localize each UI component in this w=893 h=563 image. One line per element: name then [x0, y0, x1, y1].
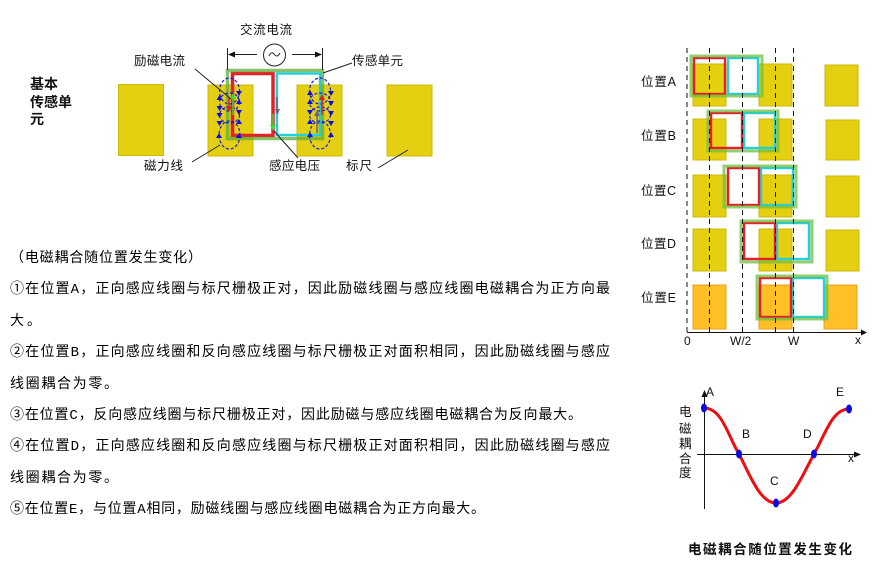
- position A: [641, 56, 858, 106]
- y axis label: 磁: [679, 421, 692, 436]
- AC source dimension: [228, 44, 322, 70]
- panel: position diagrams: [641, 48, 867, 348]
- chart: coupling versus position: [679, 385, 861, 509]
- position D: [641, 221, 859, 271]
- text block: explanation: [10, 250, 610, 518]
- y axis label: 电: [679, 405, 692, 419]
- position C: 位置C: [641, 183, 676, 198]
- label: AC current: 交流电流: [240, 22, 292, 37]
- dashed position guides: [687, 48, 794, 332]
- position axis: x: [855, 333, 861, 347]
- text block: explanation: ⑤在位置E，与位置A相同，励磁线圈与感应线圈电磁耦合为正方向最大。: [10, 500, 485, 518]
- position C: [641, 166, 859, 217]
- position axis: 0: [684, 334, 691, 348]
- position axis: W/2: [730, 334, 752, 348]
- point labels: E: [836, 385, 844, 399]
- text block: explanation: ③在位置C，反向感应线圈与标尺栅极正对，因此励磁与感应线圈电磁耦合为反向最大。: [10, 406, 582, 424]
- label: induced voltage: 感应电压: [269, 158, 320, 173]
- position axis: [684, 330, 867, 348]
- label: scale: 标尺: [346, 159, 372, 173]
- label: excitation current: 励磁电流: [134, 53, 185, 68]
- text block: explanation: （电磁耦合随位置发生变化）: [10, 250, 202, 267]
- text block: explanation: 线圈耦合为零。: [10, 470, 118, 487]
- text block: explanation: ②在位置B，正向感应线圈和反向感应线圈与标尺栅极正对面积相同，因此励磁线圈与感应: [10, 343, 610, 361]
- heading: basic sensing unit: 传感单: [30, 94, 72, 110]
- position A: 位置A: [641, 74, 677, 89]
- heading: basic sensing unit: [30, 76, 72, 127]
- label: flux lines: 磁力线: [144, 158, 183, 173]
- position axis: W: [788, 334, 800, 348]
- point labels: [706, 385, 854, 488]
- y axis label: 耦: [679, 437, 692, 451]
- point labels: x: [848, 451, 854, 465]
- position D: 位置D: [641, 236, 676, 251]
- position E: 位置E: [641, 290, 676, 305]
- position B: [641, 111, 859, 160]
- curve points: [701, 404, 852, 508]
- position B: 位置B: [641, 128, 676, 143]
- point labels: D: [803, 427, 812, 441]
- text block: explanation: 大。: [10, 313, 41, 330]
- current arrows: [226, 93, 325, 133]
- point labels: A: [706, 385, 714, 399]
- label: sensing unit: 传感单元: [352, 53, 403, 68]
- leader lines: [192, 63, 408, 168]
- chart caption: 电磁耦合随位置发生变化: [688, 541, 852, 557]
- position E: [641, 276, 857, 329]
- text block: explanation: ①在位置A，正向感应线圈与标尺栅极正对，因此励磁线圈与感应线圈电磁耦合为正方向最: [10, 280, 610, 298]
- panel: basic sensing unit diagram: [118, 22, 432, 173]
- chart axes: [697, 390, 861, 509]
- text block: explanation: 线圈耦合为零。: [10, 376, 118, 393]
- y axis label: 度: [679, 465, 692, 480]
- point labels: B: [742, 427, 750, 441]
- heading: basic sensing unit: 元: [30, 111, 44, 127]
- point labels: C: [770, 474, 779, 488]
- scale gratings: [118, 84, 432, 156]
- heading: basic sensing unit: 基本: [30, 76, 58, 92]
- coupling curve: [704, 408, 849, 503]
- y axis label: [679, 405, 692, 480]
- sensing coils: [228, 70, 322, 138]
- y axis label: 合: [679, 451, 692, 466]
- magnetic flux lines: [216, 78, 334, 149]
- text block: explanation: ④在位置D，正向感应线圈和反向感应线圈与标尺栅极正对面积相同，因此励磁线圈与感应: [10, 437, 610, 455]
